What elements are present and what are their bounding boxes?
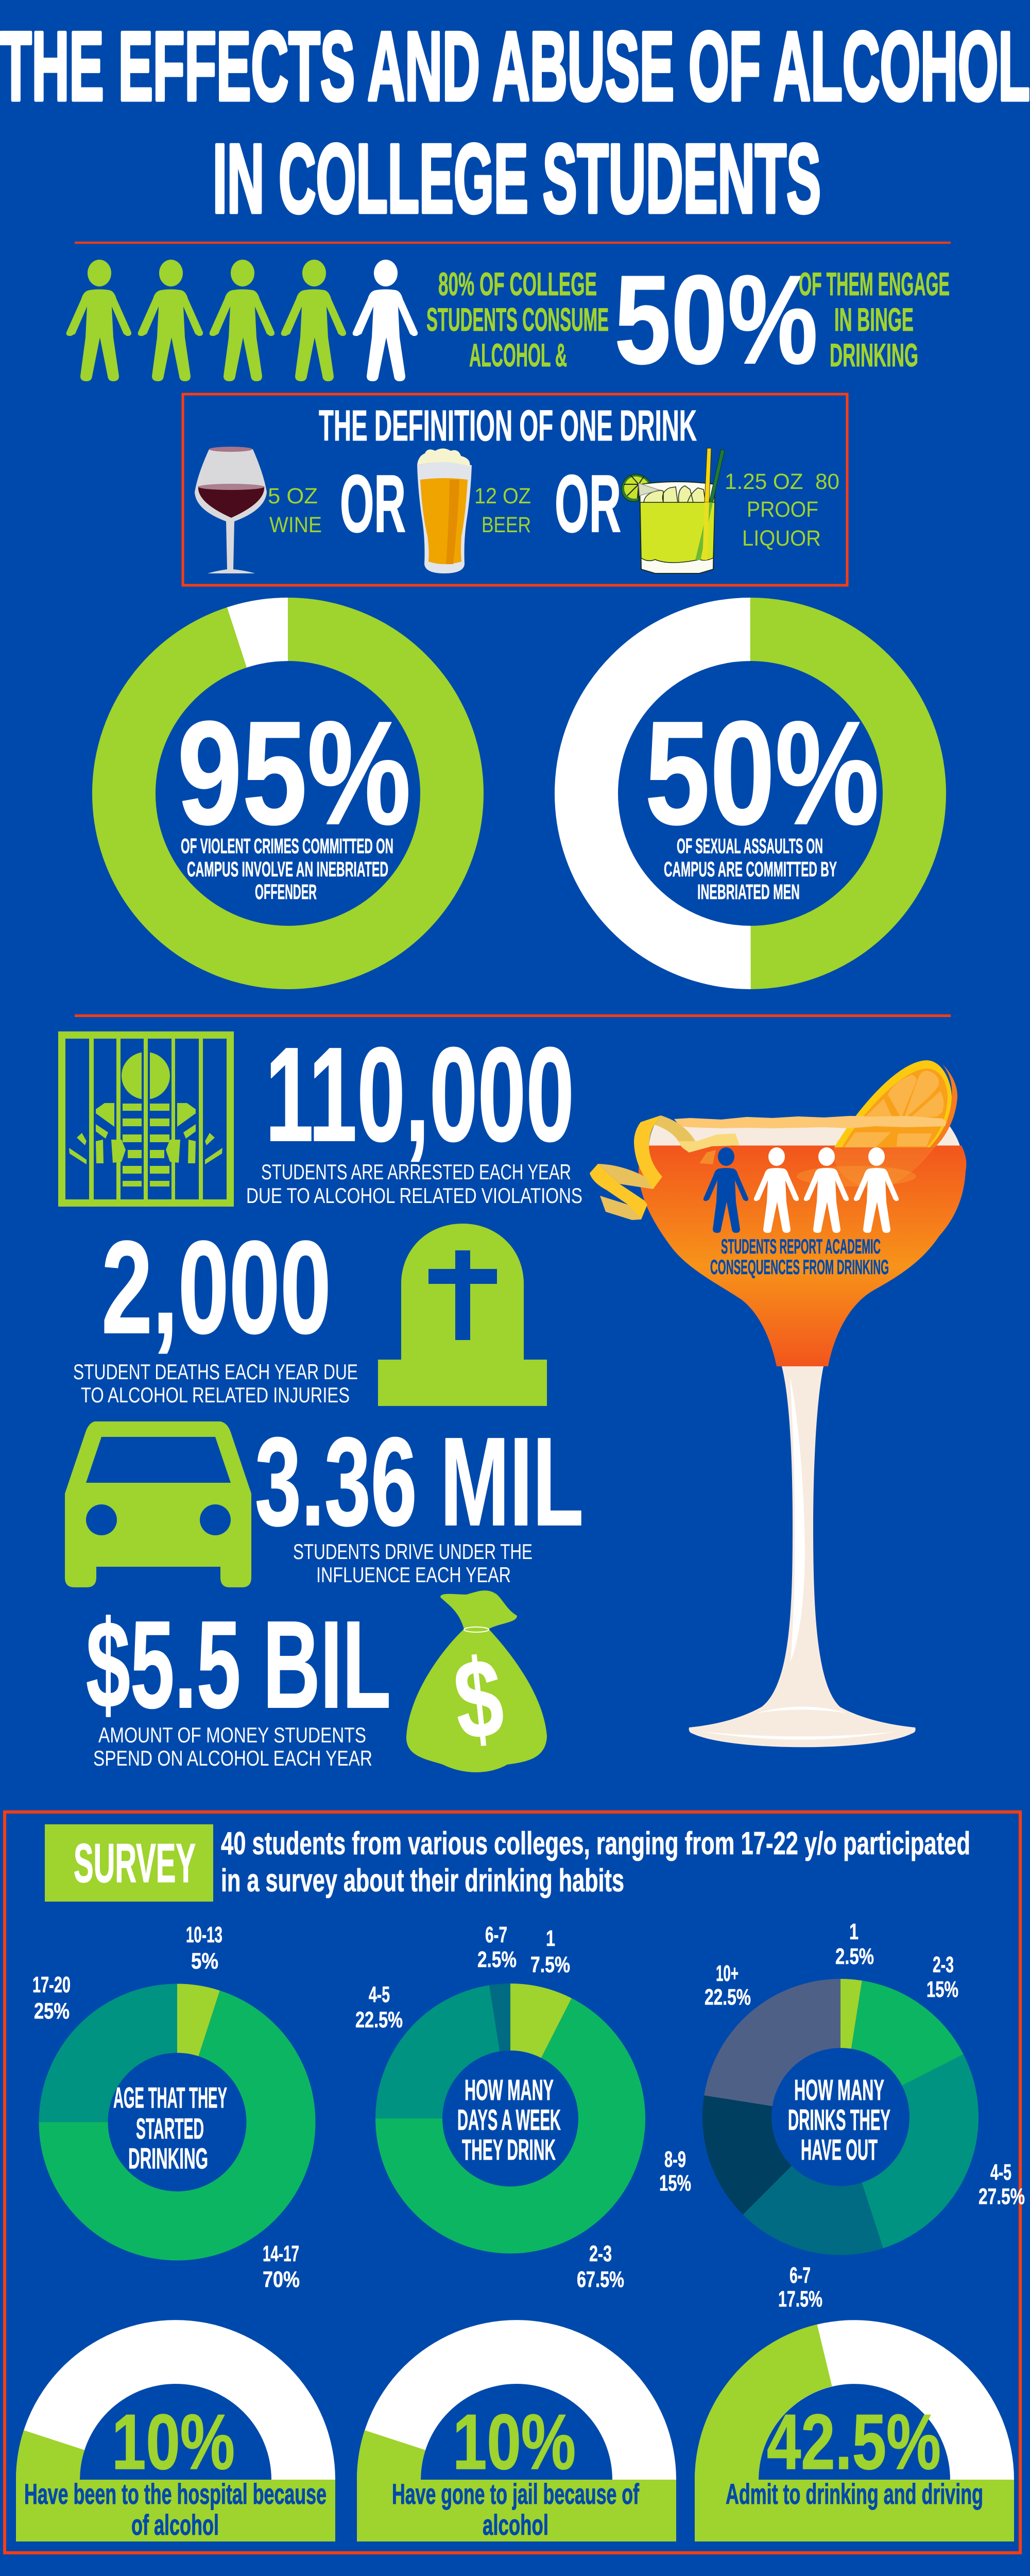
text: 12 oz beer: BEER <box>482 513 531 537</box>
data labels: drinks: 2.5% <box>835 1944 874 1969</box>
text: money caption: SPEND ON ALCOHOL EACH YEAR <box>93 1746 372 1770</box>
data labels: age: 25% <box>34 1998 70 2024</box>
panel: deaths <box>73 1214 547 1407</box>
label: how many drinks they have out: HAVE OUT <box>801 2133 878 2166</box>
text: 12 oz beer: 12 OZ <box>474 484 531 509</box>
number: 10 percent: 10% <box>112 2398 235 2486</box>
data labels: drinks: 6-7 <box>789 2263 811 2288</box>
text: hospital caption: Have been to the hospital because <box>24 2478 327 2510</box>
data labels: drinks: 8-9 <box>664 2147 686 2172</box>
data labels: drinks: 17.5% <box>778 2286 822 2312</box>
label: age that they started drinking: DRINKING <box>128 2142 208 2175</box>
data labels: days: 22.5% <box>355 2007 403 2032</box>
data labels: drinks <box>659 1919 1025 2312</box>
chart: days a week they drink <box>355 1922 647 2292</box>
text: survey description: in a survey about their drinking habits <box>221 1863 624 1899</box>
label: how many drinks they have out: HOW MANY <box>794 2074 884 2107</box>
label: age that they started drinking: STARTED <box>136 2112 204 2145</box>
heading: definition of one drink: THE DEFINITION OF ONE DRINK <box>319 401 697 450</box>
data labels: days: 1 <box>546 1926 555 1951</box>
panel: arrests <box>62 1020 582 1208</box>
text: 12 oz beer <box>474 484 531 537</box>
text: violent crimes caption: CAMPUS INVOLVE AN INEBRIATED <box>187 857 388 881</box>
text: jail caption <box>392 2478 639 2541</box>
icon: five people <box>66 260 418 381</box>
panel: survey <box>5 1812 1025 2553</box>
illustration: cocktail glass with academic consequences <box>590 1060 966 1747</box>
text: sexual assaults caption: CAMPUS ARE COMMITTED BY <box>664 857 837 881</box>
text: violent crimes caption: OFFENDER <box>255 880 317 904</box>
text: hospital caption: of alcohol <box>131 2509 219 2541</box>
lemon twist <box>590 1115 740 1220</box>
icon: four small people <box>703 1147 899 1233</box>
text: jail caption: Have gone to jail because of <box>392 2478 639 2510</box>
panel: drunk driving <box>65 1411 583 1587</box>
label: how many drinks they have out: DRINKS THEY <box>788 2104 890 2137</box>
label: age that they started drinking <box>113 2081 227 2175</box>
text: 1.25 oz 80 proof liquor <box>725 469 839 551</box>
donut: 50 percent sexual assaults <box>586 630 915 957</box>
orange slice <box>797 1060 957 1190</box>
text: driving caption <box>293 1539 533 1587</box>
icon: prisoner behind bars <box>62 1035 230 1203</box>
title <box>0 12 1030 233</box>
label: how many days a week they drink <box>457 2074 561 2166</box>
number: 50 percent: 50% <box>614 249 818 390</box>
chart: age they started drinking <box>32 1922 308 2292</box>
icon: car <box>65 1421 251 1587</box>
text: 80 percent of college students <box>426 266 609 374</box>
data labels: age: 14-17 <box>263 2241 299 2266</box>
text: binge drinking <box>799 266 950 374</box>
panel: definition of one drink <box>183 394 847 585</box>
text: driving caption: INFLUENCE EACH YEAR <box>316 1563 511 1587</box>
icon: wine glass <box>195 447 267 573</box>
salt rim <box>674 1116 947 1128</box>
data labels: age <box>32 1922 300 2292</box>
data labels: drinks: 4-5 <box>990 2160 1011 2185</box>
text: deaths caption: STUDENT DEATHS EACH YEAR DUE <box>73 1360 358 1384</box>
donut: 95 percent violent crimes <box>81 587 494 1000</box>
text: 80 percent of college students: ALCOHOL & <box>469 337 567 374</box>
text: 1.25 oz 80 proof liquor: LIQUOR <box>742 526 821 551</box>
text: survey description <box>221 1826 970 1899</box>
text: academic consequences: STUDENTS REPORT ACADEMIC <box>721 1235 881 1258</box>
text: 5 oz wine: WINE <box>269 513 322 537</box>
text: sexual assaults caption <box>664 834 837 904</box>
icon: money bag <box>406 1590 547 1772</box>
icon: gravestone <box>378 1224 547 1406</box>
number: 5.5 billion dollars: $5.5 BIL <box>86 1596 391 1734</box>
data labels: days: 4-5 <box>369 1982 390 2007</box>
data labels: drinks: 10+ <box>716 1961 739 1986</box>
text: 80 percent of college students: 80% OF COLLEGE <box>438 266 597 302</box>
text: violent crimes caption: OF VIOLENT CRIMES COMMITTED ON <box>181 834 393 858</box>
number: 95 percent: 95% <box>177 690 411 855</box>
data labels: drinks: 22.5% <box>705 1985 751 2010</box>
data labels: days: 7.5% <box>530 1952 570 1977</box>
text: or: OR <box>340 459 406 549</box>
gauge: drinking and driving 42.5 percent <box>695 2320 1014 2541</box>
data labels: drinks: 2-3 <box>933 1952 954 1977</box>
number: 50 percent: 50% <box>645 690 879 855</box>
number: 2,000: 2,000 <box>101 1214 331 1361</box>
data labels: age: 10-13 <box>186 1922 222 1947</box>
text: arrests caption: STUDENTS ARE ARRESTED EACH YEAR <box>261 1160 571 1184</box>
text: 80 percent of college students: STUDENTS CONSUME <box>426 302 609 338</box>
data labels: days: 2-3 <box>589 2241 612 2266</box>
text: money caption: AMOUNT OF MONEY STUDENTS <box>98 1723 366 1747</box>
label: how many days a week they drink: HOW MANY <box>465 2074 554 2107</box>
text: violent crimes caption <box>181 834 393 904</box>
data labels: age: 70% <box>263 2267 300 2292</box>
gauge: jail 10 percent <box>357 2320 676 2541</box>
text: binge drinking: IN BINGE <box>834 302 914 338</box>
icon: beer glass <box>417 448 472 573</box>
text: deaths caption <box>73 1360 358 1407</box>
data labels: days: 2.5% <box>477 1947 517 1972</box>
chart: drinks they have out <box>659 1919 1025 2312</box>
data labels: days: 6-7 <box>485 1922 507 1947</box>
badge: survey <box>45 1824 213 1902</box>
glass stem and base <box>689 1366 916 1747</box>
data labels: drinks: 15% <box>926 1977 958 2002</box>
text: 1.25 oz 80 proof liquor: 1.25 OZ 80 <box>725 469 839 494</box>
data labels: age: 5% <box>191 1948 218 1974</box>
text: money caption <box>93 1723 372 1770</box>
data labels: drinks: 15% <box>659 2171 691 2196</box>
number: 3.36 MIL: 3.36 MIL <box>255 1411 583 1552</box>
gauge: hospital 10 percent <box>16 2320 335 2541</box>
icon: cocktail glass <box>622 448 725 573</box>
data labels: days <box>355 1922 624 2292</box>
text: or: OR <box>555 459 621 549</box>
text: 5 oz wine <box>268 484 322 537</box>
label: how many drinks they have out <box>788 2074 890 2166</box>
icon: money bag: $ <box>449 1634 508 1763</box>
panel: 80 percent stat <box>66 249 950 390</box>
text: jail caption: alcohol <box>483 2509 548 2541</box>
text: arrests caption <box>246 1160 582 1208</box>
text: academic consequences <box>710 1235 889 1279</box>
text: deaths caption: TO ALCOHOL RELATED INJURIES <box>81 1383 350 1407</box>
label: how many days a week they drink: THEY DRINK <box>462 2133 556 2166</box>
number: 42.5 percent: 42.5% <box>767 2398 941 2486</box>
glass rim <box>649 1125 960 1146</box>
text: sexual assaults caption: INEBRIATED MEN <box>697 880 800 904</box>
label: how many days a week they drink: DAYS A WEEK <box>457 2104 561 2137</box>
chart: age they started drinking: AGE THAT THEY <box>113 2081 227 2114</box>
data labels: age: 17-20 <box>32 1972 71 1997</box>
badge: survey: SURVEY <box>74 1832 196 1894</box>
text: arrests caption: DUE TO ALCOHOL RELATED VIOLATIONS <box>246 1183 582 1208</box>
liquid in bowl <box>639 1146 966 1366</box>
data labels: days: 67.5% <box>577 2267 624 2292</box>
text: driving caption: STUDENTS DRIVE UNDER THE <box>293 1539 533 1564</box>
data labels: drinks: 1 <box>849 1919 859 1944</box>
text: 5 oz wine: 5 OZ <box>268 484 318 509</box>
panel: money spent <box>86 1590 547 1772</box>
text: sexual assaults caption: OF SEXUAL ASSAULTS ON <box>677 834 823 858</box>
text: binge drinking: DRINKING <box>830 337 918 374</box>
text: 1.25 oz 80 proof liquor: PROOF <box>747 497 818 522</box>
text: hospital caption <box>24 2478 327 2541</box>
number: 110,000: 110,000 <box>265 1020 574 1170</box>
number: 10 percent: 10% <box>453 2398 576 2486</box>
